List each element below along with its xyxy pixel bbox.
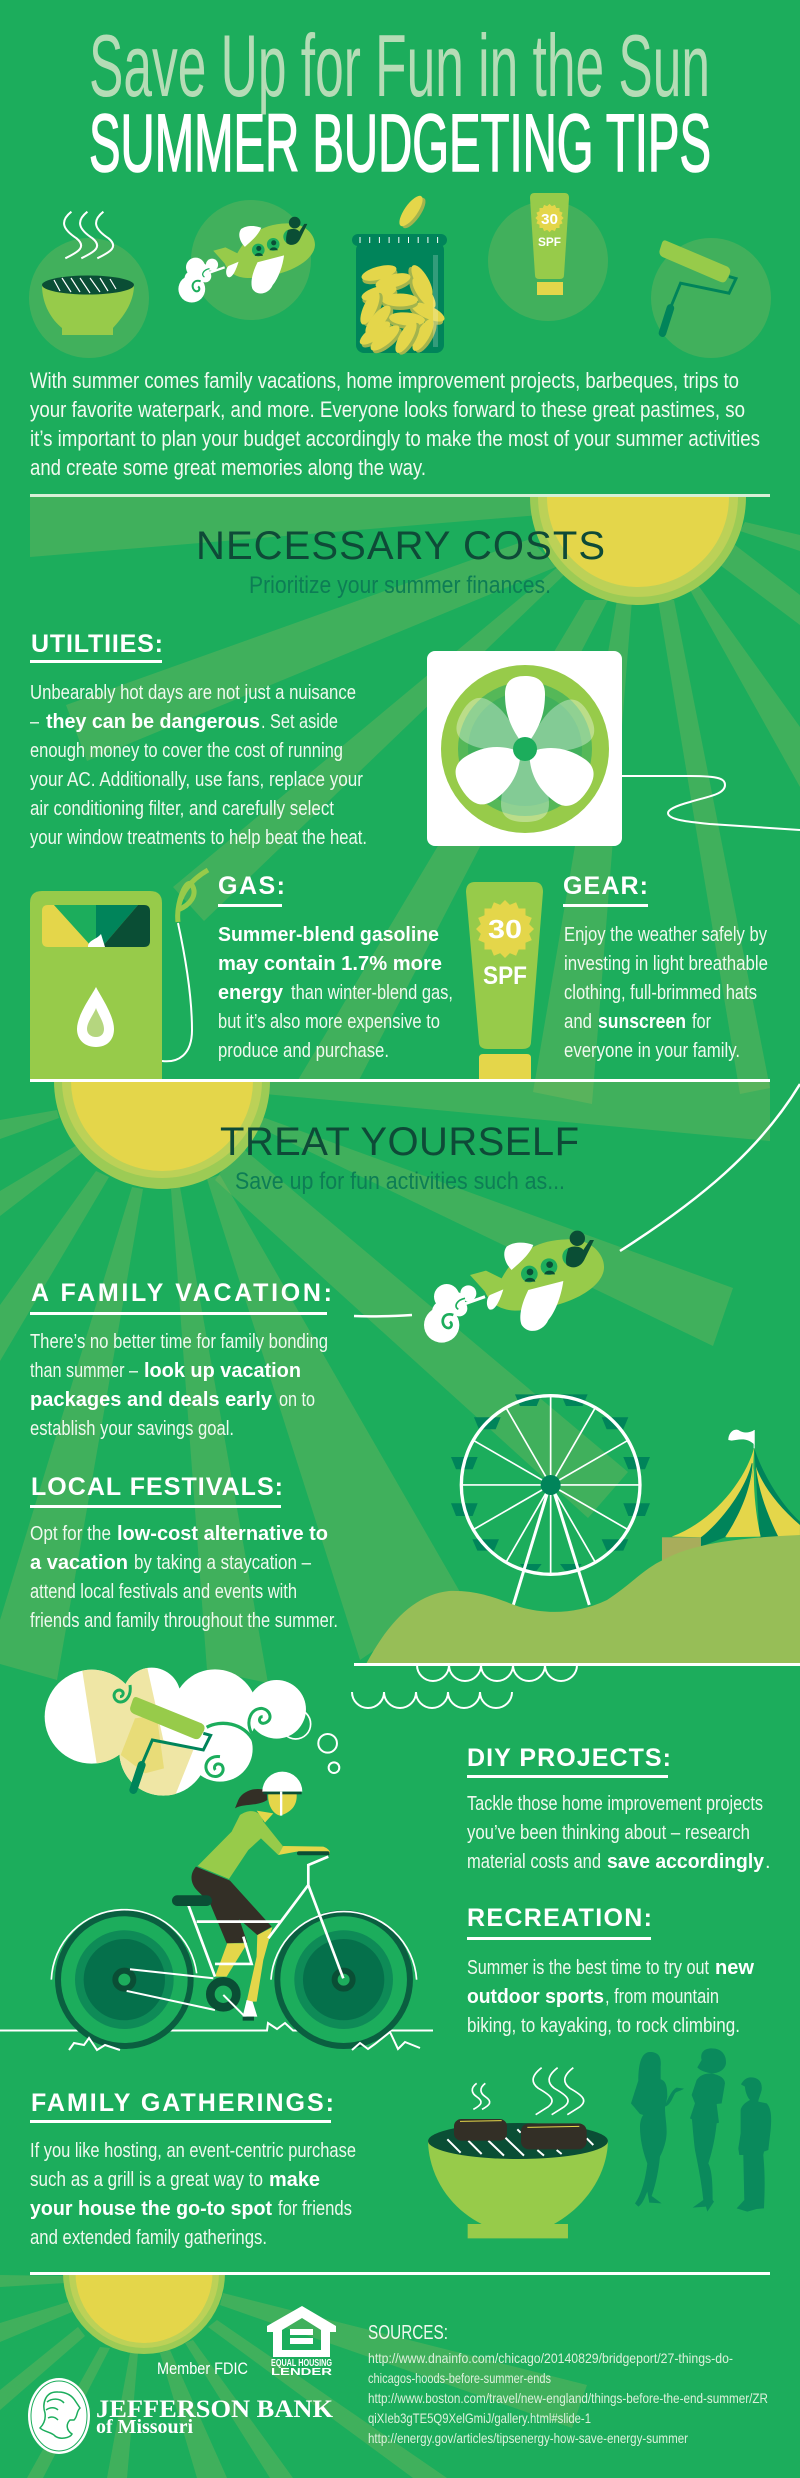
- illustration: barbecue grill: [428, 2068, 608, 2238]
- sun: necessary costs: [530, 497, 746, 605]
- text block: diy projects: save accordingly: [607, 1851, 765, 1873]
- text block: family vacation: establish your savings goal.: [30, 1418, 234, 1440]
- sources: http://www.dnainfo.com/chicago/20140829/bridgeport/27-things-do-: [368, 2350, 733, 2366]
- section heading: necessary costs: Prioritize your summer finances.: [249, 572, 551, 599]
- icon: coin jar: [352, 193, 447, 358]
- text block: recreation: , from mountain: [605, 1986, 719, 2008]
- text block: utilities: UTILTIIES:: [31, 630, 163, 658]
- text block: gear: for: [692, 1011, 711, 1033]
- icon: sunscreen: 30: [541, 211, 558, 228]
- text block: gear: [563, 872, 768, 1062]
- text block: gear: investing in light breathable: [564, 953, 768, 975]
- medallion: [28, 2378, 90, 2454]
- text block: family vacation: A FAMILY VACATION:: [31, 1279, 332, 1307]
- text block: local festivals: Opt for the: [30, 1523, 111, 1545]
- text block: local festivals: low-cost alternative to: [117, 1523, 328, 1545]
- icon: sunscreen: SPF: [538, 235, 561, 249]
- text block: local festivals: LOCAL FESTIVALS:: [31, 1473, 283, 1501]
- hill: [366, 1535, 800, 1664]
- text block: family vacation: packages and deals early: [30, 1389, 273, 1411]
- decorative water line and waves: [352, 1664, 800, 1708]
- member fdic: Member FDIC: [157, 2359, 248, 2378]
- text block: local festivals: attend local festivals and events with: [30, 1581, 297, 1603]
- icon: sunscreen tube: [466, 882, 543, 1080]
- bicycle wheels: [51, 1910, 417, 2046]
- text block: recreation: RECREATION:: [467, 1904, 652, 1932]
- equal housing lender logo: LENDER: [271, 2367, 333, 2378]
- sun rays: necessary costs: [30, 497, 800, 1104]
- text block: gas: [218, 872, 453, 1062]
- jefferson bank logo: [28, 2378, 334, 2454]
- sources: chicagos-hoods-before-summer-ends: [368, 2370, 551, 2386]
- text block: utilities: your window treatments to help beat the heat.: [30, 827, 367, 849]
- title: [89, 16, 711, 189]
- text block: family gatherings: your house the go-to spot: [30, 2198, 272, 2220]
- text block: family gatherings: [30, 2089, 356, 2249]
- icon: airplane: [178, 200, 315, 320]
- illustration: silhouettes of guests: [631, 2048, 771, 2212]
- text block: gear: clothing, full-brimmed hats: [564, 982, 757, 1004]
- text block: gas: GAS:: [218, 872, 285, 900]
- text block: utilities: [30, 630, 367, 849]
- illustration: cyclist thinking of home project: [45, 1665, 417, 2046]
- text block: utilities: your AC. Additionally, use fans, replace your: [30, 769, 363, 791]
- jefferson bank logo: of Missouri: [96, 2416, 193, 2438]
- ground line: [0, 2023, 433, 2030]
- icon: airplane with trail: [354, 1084, 800, 1343]
- text block: diy projects: [467, 1744, 771, 1873]
- text block: family gatherings: FAMILY GATHERINGS:: [31, 2089, 334, 2117]
- text block: recreation: Summer is the best time to try out: [467, 1957, 709, 1979]
- text block: utilities: they can be dangerous: [46, 711, 260, 733]
- sun: footer: [63, 2273, 225, 2354]
- thought cloud: [45, 1665, 339, 1800]
- illustration: ferris wheel and tent on hill: [366, 1394, 800, 1664]
- sources: http://energy.gov/articles/tipsenergy-how-save-energy-summer: [368, 2430, 688, 2446]
- cyclist body: [192, 1772, 330, 2017]
- text block: family vacation: on to: [279, 1389, 315, 1411]
- text block: local festivals: a vacation: [30, 1552, 128, 1574]
- text block: diy projects: DIY PROJECTS:: [467, 1744, 671, 1772]
- intro text: and create some great memories along the way.: [30, 455, 426, 480]
- text block: family gatherings: for friends: [278, 2198, 352, 2220]
- text block: utilities: Unbearably hot days are not just a nuisance: [30, 682, 356, 704]
- text block: local festivals: by taking a staycation –: [134, 1552, 312, 1574]
- text block: gear: and: [564, 1011, 592, 1033]
- icon row: [29, 193, 771, 358]
- text block: family vacation: look up vacation: [144, 1360, 301, 1382]
- drivetrain and seat: [177, 1853, 328, 2021]
- text block: gear: GEAR:: [563, 872, 648, 900]
- tent: [662, 1430, 800, 1564]
- text block: recreation: biking, to kayaking, to rock climbing.: [467, 2015, 740, 2037]
- text block: family gatherings: and extended family gatherings.: [30, 2227, 267, 2249]
- sources: SOURCES:: [368, 2322, 448, 2344]
- text block: utilities: . Set aside: [261, 711, 338, 733]
- icon: paint roller: [651, 238, 771, 358]
- text block: recreation: new: [715, 1957, 754, 1979]
- text block: family vacation: There’s no better time for family bonding: [30, 1331, 328, 1353]
- ferris wheel: [451, 1394, 650, 1605]
- sun rays: footer: [0, 2275, 587, 2478]
- text block: gas: than winter-blend gas,: [291, 982, 453, 1004]
- icon: sunscreen tube: 30: [488, 914, 522, 944]
- text block: utilities: air conditioning filter, and carefully select: [30, 798, 334, 820]
- text block: recreation: outdoor sports: [467, 1986, 604, 2008]
- section heading: necessary costs: [196, 524, 605, 599]
- text block: local festivals: friends and family throughout the summer.: [30, 1610, 338, 1632]
- icon: sunscreen tube: SPF: [483, 962, 527, 990]
- text block: gas: energy: [218, 982, 284, 1004]
- sun: treat yourself: [54, 1081, 270, 1189]
- text block: family vacation: [30, 1279, 332, 1440]
- text block: utilities: enough money to cover the cost of running: [30, 740, 343, 762]
- icon: window fan: [427, 651, 800, 846]
- section heading: necessary costs: NECESSARY COSTS: [196, 524, 605, 568]
- intro text: [30, 368, 760, 480]
- text block: family gatherings: make: [269, 2169, 320, 2191]
- section heading: treat yourself: [220, 1120, 579, 1195]
- text block: gear: sunscreen: [598, 1011, 686, 1033]
- jefferson bank logo: JEFFERSON BANK: [96, 2396, 334, 2423]
- text block: gas: Summer-blend gasoline: [218, 924, 439, 946]
- bicycle frame: [127, 1857, 343, 2010]
- grass tufts: [69, 2032, 420, 2050]
- icon: sunscreen: [488, 193, 608, 321]
- section heading: treat yourself: TREAT YOURSELF: [220, 1120, 579, 1164]
- text block: family vacation: than summer –: [30, 1360, 139, 1382]
- text block: diy projects: .: [765, 1851, 771, 1873]
- equal housing lender logo: [267, 2306, 336, 2378]
- text block: recreation: [467, 1904, 754, 2037]
- text block: gear: everyone in your family.: [564, 1040, 740, 1062]
- text block: gas: may contain 1.7% more: [218, 953, 442, 975]
- sun rays: treat yourself: [0, 1082, 770, 1683]
- sources: [368, 2322, 768, 2446]
- text block: gas: but it’s also more expensive to: [218, 1011, 440, 1033]
- icon: grill: [29, 212, 149, 358]
- text block: diy projects: you’ve been thinking about – research: [467, 1822, 750, 1844]
- text block: utilities: –: [30, 711, 40, 733]
- sources: qiXIeb3gTE5Q9XelGmiJ/gallery.html#slide-1: [368, 2410, 591, 2426]
- text block: local festivals: [30, 1473, 338, 1632]
- equal housing lender logo: EQUAL HOUSING: [271, 2358, 332, 2369]
- text block: family gatherings: such as a grill is a great way to: [30, 2169, 263, 2191]
- text block: gas: produce and purchase.: [218, 1040, 389, 1062]
- text block: diy projects: material costs and: [467, 1851, 601, 1873]
- icon: gas pump: [30, 870, 208, 1080]
- section heading: treat yourself: Save up for fun activities such as...: [235, 1168, 565, 1195]
- text block: family gatherings: If you like hosting, an event-centric purchase: [30, 2140, 356, 2162]
